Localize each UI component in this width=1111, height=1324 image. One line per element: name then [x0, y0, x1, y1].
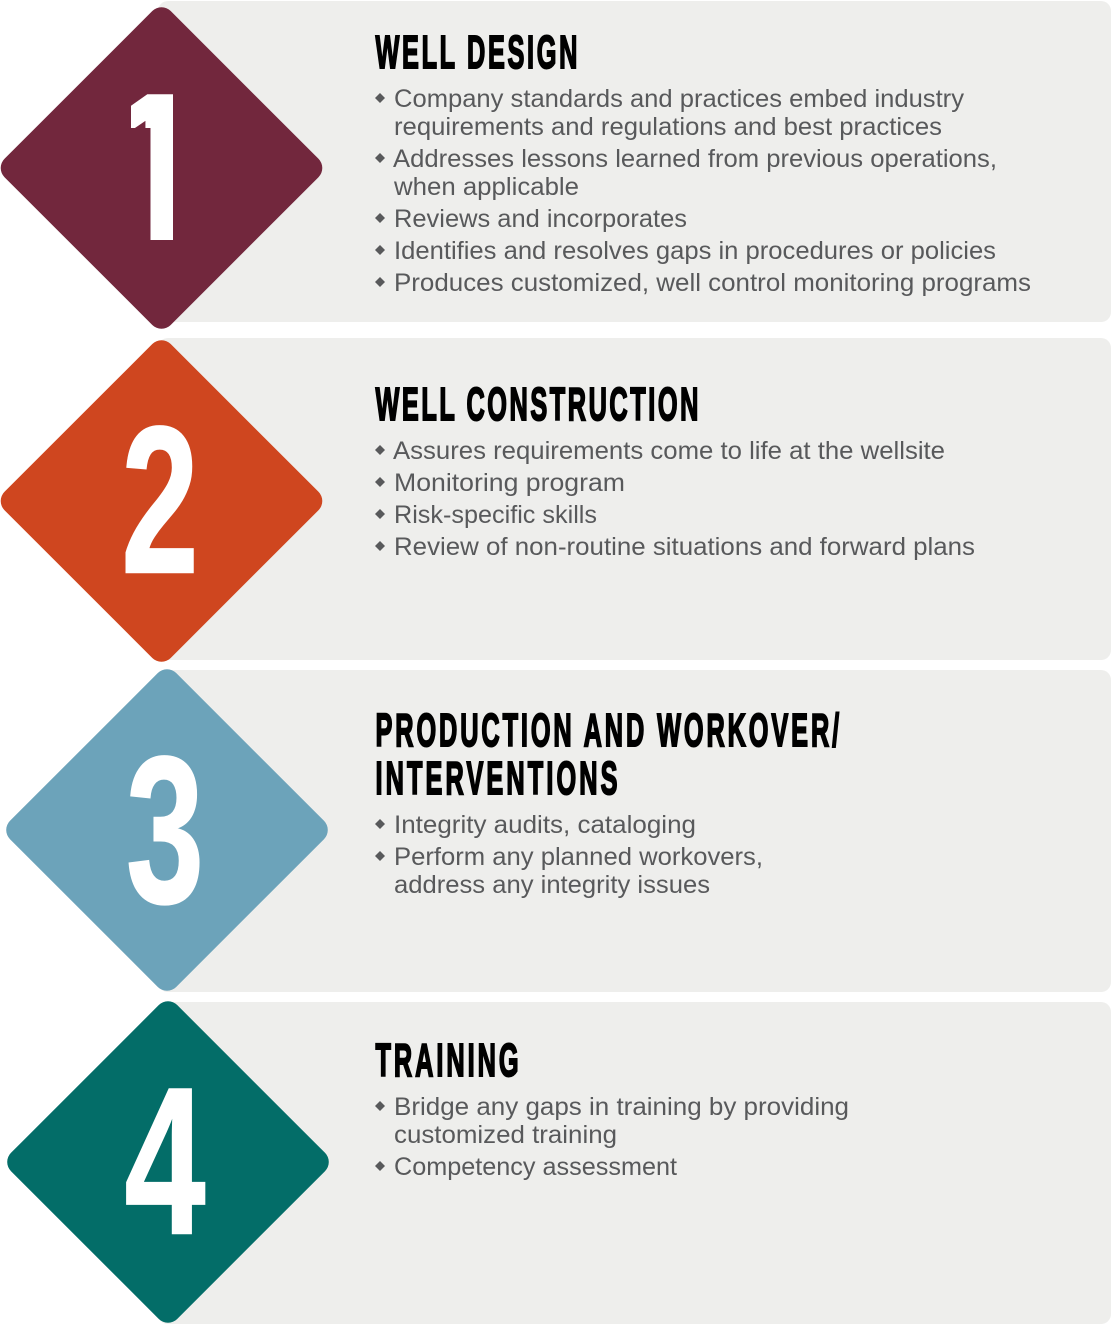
- panel: well construction: [0, 335, 1111, 667]
- list: production and workover: [375, 811, 763, 899]
- heading: production and workover: [376, 704, 839, 804]
- number 1: 1: [101, 49, 208, 284]
- panel: well design: [0, 1, 1111, 334]
- number 3: 3: [126, 712, 204, 947]
- heading: well design: WELL DESIGN: [376, 26, 577, 78]
- list: well design: Produces customized, well control monitoring programs: [394, 269, 1031, 297]
- list: well design: Addresses lessons learned from previous operations,: [393, 145, 997, 173]
- list: production and workover: address any integrity issues: [394, 871, 710, 899]
- heading: training: TRAINING: [376, 1034, 519, 1086]
- list: training: [375, 1093, 849, 1181]
- list: training: Competency assessment: [394, 1153, 677, 1181]
- number 4: 4: [124, 1044, 206, 1279]
- icon: diamond 2: [0, 335, 328, 667]
- list: training: Bridge any gaps in training by providing: [394, 1093, 849, 1121]
- list: training: customized training: [394, 1121, 617, 1149]
- icon: diamond 4: [2, 996, 334, 1324]
- list: well design: Company standards and practices embed industry: [394, 85, 964, 113]
- icon: diamond 3: [1, 664, 333, 996]
- list: well design: Identifies and resolves gaps in procedures or policies: [394, 237, 996, 265]
- list: well design: when applicable: [393, 173, 579, 201]
- list: well construction: Monitoring program: [394, 469, 625, 497]
- number 2: 2: [121, 383, 199, 617]
- list: well construction: Review of non-routine situations and forward plans: [394, 533, 975, 561]
- list: production and workover: Perform any planned workovers,: [394, 843, 763, 871]
- panel: training: [2, 996, 1111, 1324]
- list: well design: Reviews and incorporates: [394, 205, 687, 233]
- list: well design: [375, 85, 1031, 297]
- heading: well construction: WELL CONSTRUCTION: [376, 378, 698, 430]
- icon: diamond 1: [0, 2, 328, 334]
- panel: production and workover: [1, 664, 1111, 996]
- heading: production and workover: PRODUCTION AND WORKOVER/: [376, 704, 839, 756]
- list: well construction: Assures requirements come to life at the wellsite: [393, 437, 945, 465]
- heading: production and workover: INTERVENTIONS: [376, 752, 618, 804]
- list: well construction: [375, 437, 975, 561]
- list: well construction: Risk-specific skills: [394, 501, 597, 529]
- list: production and workover: Integrity audits, cataloging: [394, 811, 696, 839]
- list: well design: requirements and regulations and best practices: [394, 113, 942, 141]
